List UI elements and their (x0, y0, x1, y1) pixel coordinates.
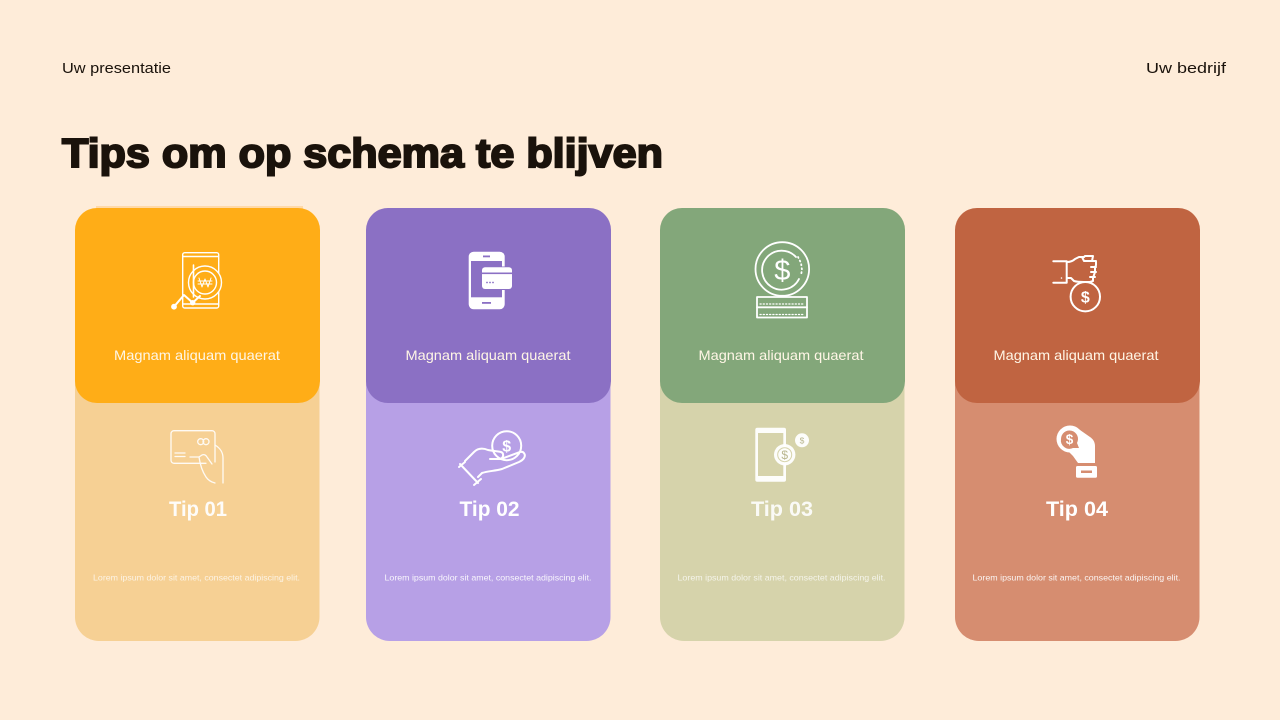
lower card 02 (366, 300, 610, 641)
upper card 04 (955, 208, 1200, 403)
upper card 03 (660, 208, 905, 403)
upper card 01 (75, 208, 320, 403)
heading: Tip 02: Tip 02 (460, 497, 520, 521)
lower card 04 (955, 300, 1200, 641)
description 03: Lorem ipsum dolor sit amet, consectet adipiscing elit. (678, 572, 886, 582)
icon: hand holding card (171, 431, 223, 483)
upper card 02 (366, 208, 611, 403)
icon: hand holding coin (459, 431, 525, 485)
icon: phone with won coin and chart (172, 253, 222, 309)
icon: phone with coins (755, 428, 809, 482)
header: presentation name: Uw presentatie (62, 60, 171, 77)
heading: Tip 04: Tip 04 (1046, 497, 1108, 521)
icon: hand holding coin: $ (502, 438, 511, 456)
icon: phone with coins: $ (781, 448, 788, 462)
panel: tip 02 (366, 208, 611, 641)
icon: hand holding money bag: $ (1081, 290, 1090, 306)
icon: coin on keyboard base: $ (774, 255, 790, 287)
icon: hand holding coin, solid (1056, 426, 1097, 478)
label 01: Magnam aliquam quaerat (114, 347, 280, 363)
description 02: Lorem ipsum dolor sit amet, consectet adipiscing elit. (384, 572, 592, 582)
icon: hand holding money bag (1053, 256, 1100, 311)
description 04: Lorem ipsum dolor sit amet, consectet adipiscing elit. (972, 572, 1180, 582)
heading: Tip 03: Tip 03 (751, 497, 813, 521)
lower card 03 (660, 300, 904, 641)
label 02: Magnam aliquam quaerat (406, 347, 571, 363)
icon: hand holding coin, solid: $ (1066, 432, 1074, 447)
heading: Tip 01: Tip 01 (169, 497, 227, 521)
panel: tip 01 (75, 206, 320, 641)
title: Tips om op schema te blijven (62, 130, 663, 176)
label 03: Magnam aliquam quaerat (698, 347, 864, 363)
description 01: Lorem ipsum dolor sit amet, consectet adipiscing elit. (93, 572, 300, 582)
panel: tip 04 (955, 208, 1200, 641)
lower card 01 (75, 300, 320, 641)
icon: coin on keyboard base (756, 242, 809, 318)
panel: tip 03 (660, 208, 905, 641)
header: company name: Uw bedrijf (1146, 60, 1227, 77)
label 04: Magnam aliquam quaerat (994, 347, 1159, 363)
icon: phone with payment card (469, 252, 513, 309)
icon: phone with coins: $ (800, 436, 805, 446)
